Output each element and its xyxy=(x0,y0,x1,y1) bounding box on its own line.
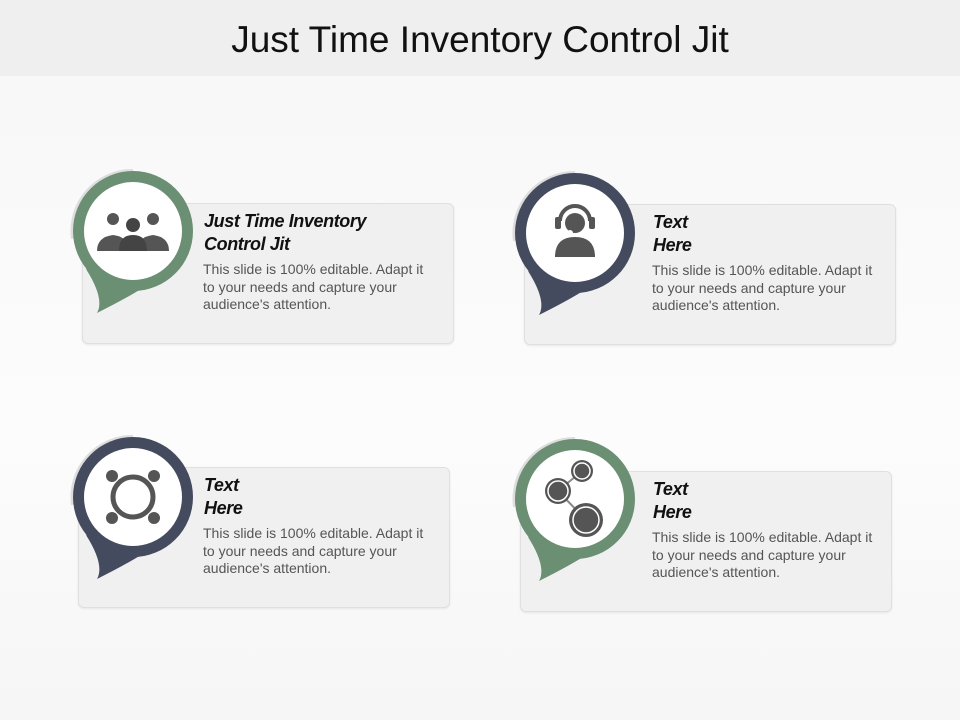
text 4: This slide is 100% editable. Adapt it to your needs and capture your audience's attention. xyxy=(652,529,872,580)
heading 4: Here xyxy=(653,502,691,522)
heading 4: Text xyxy=(653,479,688,499)
icon: pin circle group xyxy=(70,435,193,579)
heading 2: Text xyxy=(653,212,688,232)
icon: pin team xyxy=(70,169,193,313)
title: Just Time Inventory Control Jit xyxy=(231,19,729,60)
icon: pin support xyxy=(512,171,635,315)
panel: card 4 xyxy=(520,471,892,612)
heading 2: Here xyxy=(653,235,691,255)
text 3: This slide is 100% editable. Adapt it to your needs and capture your audience's attention. xyxy=(203,525,423,576)
heading 1: Control Jit xyxy=(204,234,290,254)
heading 3: Here xyxy=(204,498,242,518)
icon: pin network xyxy=(512,437,635,581)
heading 2 xyxy=(653,212,692,255)
heading 4 xyxy=(653,479,692,522)
heading 3: Text xyxy=(204,475,239,495)
heading 3 xyxy=(204,475,242,518)
panel: card 2 xyxy=(524,204,896,345)
panel: card 1 xyxy=(82,203,454,344)
heading 1 xyxy=(204,211,368,254)
panel: card 3 xyxy=(78,467,450,608)
text 1: This slide is 100% editable. Adapt it to your needs and capture your audience's attention. xyxy=(203,261,423,312)
text 2: This slide is 100% editable. Adapt it to your needs and capture your audience's attention. xyxy=(652,262,872,313)
heading 1: Just Time Inventory xyxy=(204,211,366,231)
